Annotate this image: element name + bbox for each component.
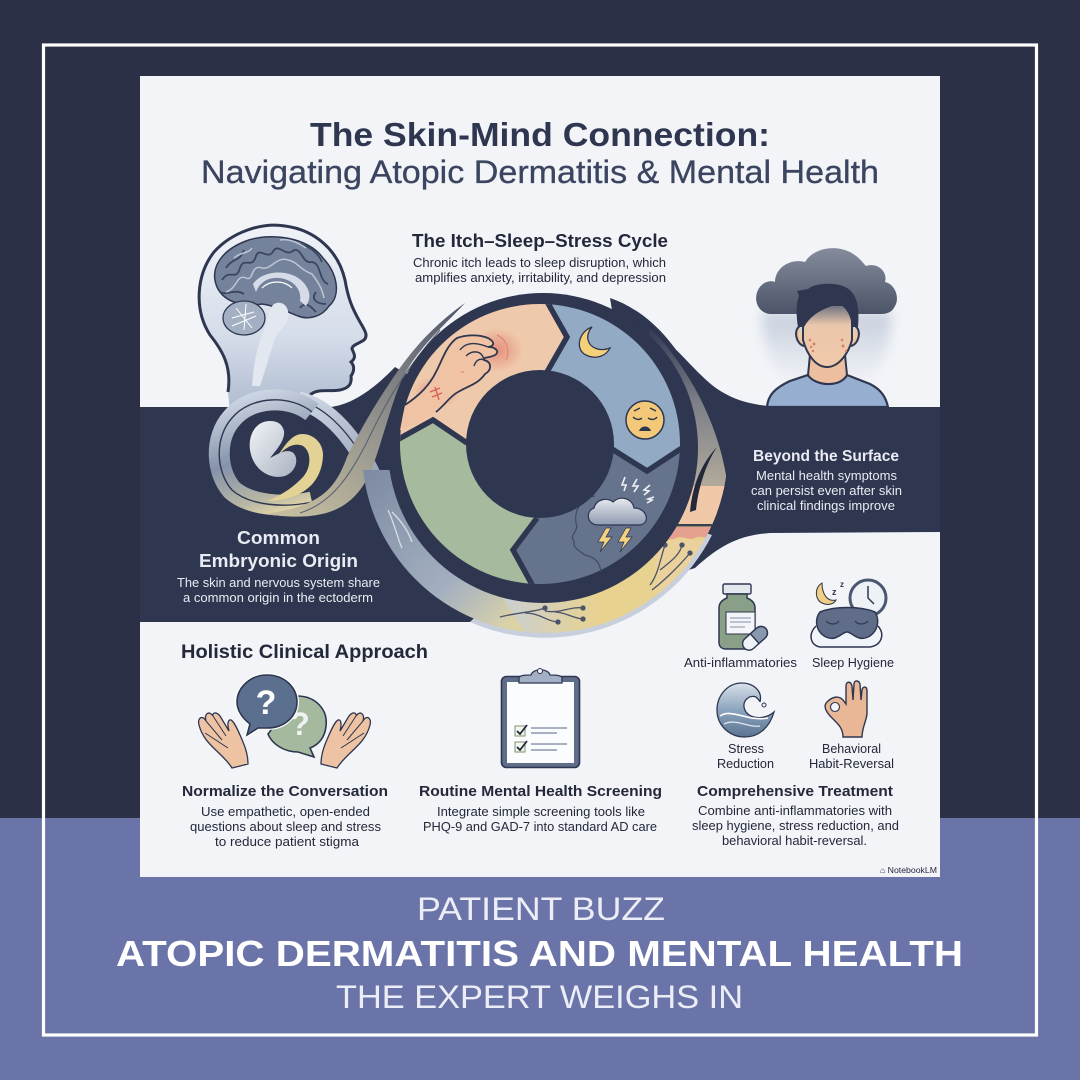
- bubble: blue: [237, 675, 297, 735]
- label: stress reduction: Stress: [728, 742, 764, 756]
- figure: person under cloud: [756, 248, 897, 407]
- diagram: cycle wheel: [400, 304, 680, 584]
- hair follicle: [690, 447, 717, 512]
- footer caption: [116, 891, 963, 1015]
- diagram: ring crescent: [363, 293, 726, 638]
- ring base: [388, 293, 698, 603]
- text: normalize the conversation: Use empathetic, open-ended: [201, 805, 370, 819]
- segment: sleep: [550, 304, 680, 468]
- centre hub: [466, 370, 614, 518]
- label: anti-inflammatories: Anti-inflammatories: [684, 656, 797, 670]
- crescent: bottom yellow: [503, 512, 718, 633]
- label: behavioral habit-reversal: Habit-Reversal: [809, 757, 894, 771]
- nerve wisp: [388, 510, 412, 548]
- icon: scratching hand: [400, 335, 508, 430]
- text: beyond the surface: can persist even after skin: [751, 484, 902, 498]
- text: normalize the conversation: Normalize the Conversation: [182, 783, 388, 800]
- footer caption: PATIENT BUZZ: [417, 891, 665, 927]
- segment: itch: [400, 304, 564, 440]
- text: routine mental health screening: Integrate simple screening tools like: [437, 805, 645, 819]
- itch glow: [471, 328, 523, 372]
- label: behavioral habit-reversal: [809, 742, 894, 771]
- title: Navigating Atopic Dermatitis & Mental Health: [201, 154, 879, 190]
- heading: holistic clinical approach: Holistic Clinical Approach: [181, 642, 428, 663]
- segment: stress: [516, 449, 680, 584]
- cloud: [756, 248, 897, 314]
- icon: conversation hands and bubbles: [199, 675, 370, 768]
- text: itch sleep stress cycle: [412, 231, 668, 285]
- icon: sleep mask and clock: z: [832, 587, 837, 597]
- background: navy upper: [0, 0, 1080, 818]
- panel: infographic card: [140, 76, 940, 877]
- text: routine mental health screening: PHQ-9 and GAD-7 into standard AD care: [423, 820, 657, 834]
- rising ribbon: [265, 303, 465, 517]
- title: [201, 116, 879, 190]
- text: beyond the surface: Mental health symptoms: [756, 469, 897, 483]
- icon: tired face: [626, 401, 664, 439]
- footer caption: ATOPIC DERMATITIS AND MENTAL HEALTH: [116, 933, 963, 974]
- text: common embryonic origin: [177, 528, 380, 605]
- text: itch sleep stress cycle: amplifies anxiety, irritability, and depression: [415, 271, 666, 285]
- text: beyond the surface: [751, 448, 902, 513]
- icon: moon: [579, 327, 610, 357]
- text: comprehensive treatment: Comprehensive Treatment: [697, 783, 893, 800]
- neuron strands: [500, 543, 692, 624]
- crescent: lower left: [363, 470, 524, 632]
- dark rim upper right: [610, 298, 727, 480]
- text: common embryonic origin: a common origin in the ectoderm: [183, 591, 373, 605]
- neck: [808, 355, 847, 384]
- icon: medicine bottle and pill: [719, 584, 770, 653]
- text: normalize the conversation: [182, 783, 388, 849]
- figure: head with brain: [199, 225, 366, 412]
- segment: depression: [400, 423, 537, 584]
- text: itch sleep stress cycle: The Itch–Sleep–Stress Cycle: [412, 231, 668, 251]
- dark hollow behind embryo: [229, 409, 317, 497]
- figure: infinity ribbon and embryo: [219, 303, 465, 520]
- shoulders: [767, 375, 888, 407]
- text: normalize the conversation: to reduce patient stigma: [215, 835, 359, 849]
- text: routine mental health screening: [419, 783, 662, 834]
- icon: sleep mask and clock: z: [840, 580, 844, 589]
- text: comprehensive treatment: [692, 783, 899, 848]
- background: periwinkle lower band: [0, 818, 1080, 1080]
- text: comprehensive treatment: behavioral habit-reversal.: [722, 834, 867, 848]
- footer caption: THE EXPERT WEIGHS IN: [336, 979, 743, 1015]
- face: [803, 305, 852, 367]
- text: common embryonic origin: Common: [237, 528, 320, 548]
- shadow under cloud: [762, 312, 891, 385]
- icon: sleep mask and clock: [811, 580, 886, 647]
- text: common embryonic origin: Embryonic Origin: [199, 551, 358, 571]
- text: routine mental health screening: Routine Mental Health Screening: [419, 783, 662, 800]
- arm glow: [413, 376, 461, 408]
- hair: [797, 284, 858, 327]
- hand: right: [321, 713, 370, 768]
- bubble: green: ?: [290, 706, 310, 742]
- dark wave band: [140, 330, 940, 622]
- crescent: right: [649, 332, 726, 490]
- title: The Skin-Mind Connection:: [310, 116, 770, 153]
- bubble: blue: ?: [256, 684, 276, 722]
- label: stress reduction: [717, 742, 774, 771]
- skin panel: [655, 486, 724, 592]
- spiral arc: [219, 400, 312, 505]
- brain: [215, 237, 336, 386]
- descending ribbon: [298, 400, 395, 520]
- embryo: [250, 421, 296, 477]
- icon: ok hand: [825, 681, 867, 737]
- icon: clipboard checklist: [502, 668, 580, 768]
- icon: stress head and storm: [572, 477, 654, 572]
- ears: [796, 326, 859, 346]
- label: behavioral habit-reversal: Behavioral: [822, 742, 881, 756]
- label: sleep hygiene: Sleep Hygiene: [812, 656, 894, 670]
- skin spots: [809, 339, 847, 352]
- text: comprehensive treatment: Combine anti-inflammatories with: [698, 804, 892, 818]
- head outline: [199, 225, 366, 395]
- text: common embryonic origin: The skin and nervous system share: [177, 576, 380, 590]
- text: comprehensive treatment: sleep hygiene, stress reduction, and: [692, 819, 899, 833]
- head silhouette fill: [199, 225, 366, 412]
- text: itch sleep stress cycle: Chronic itch leads to sleep disruption, which: [413, 256, 666, 270]
- label: stress reduction: Reduction: [717, 757, 774, 771]
- bubble: green: [268, 696, 326, 757]
- text: beyond the surface: clinical findings improve: [757, 499, 895, 513]
- icon: wave: [717, 683, 774, 737]
- text: notebooklm mark: ⌂ NotebookLM: [880, 866, 937, 875]
- text: beyond the surface: Beyond the Surface: [753, 448, 899, 465]
- gold tail: [268, 434, 323, 501]
- text: normalize the conversation: questions about sleep and stress: [190, 820, 381, 834]
- segment dividers: [397, 298, 685, 590]
- bottom shadow: [470, 500, 712, 638]
- hand: left: [199, 713, 248, 768]
